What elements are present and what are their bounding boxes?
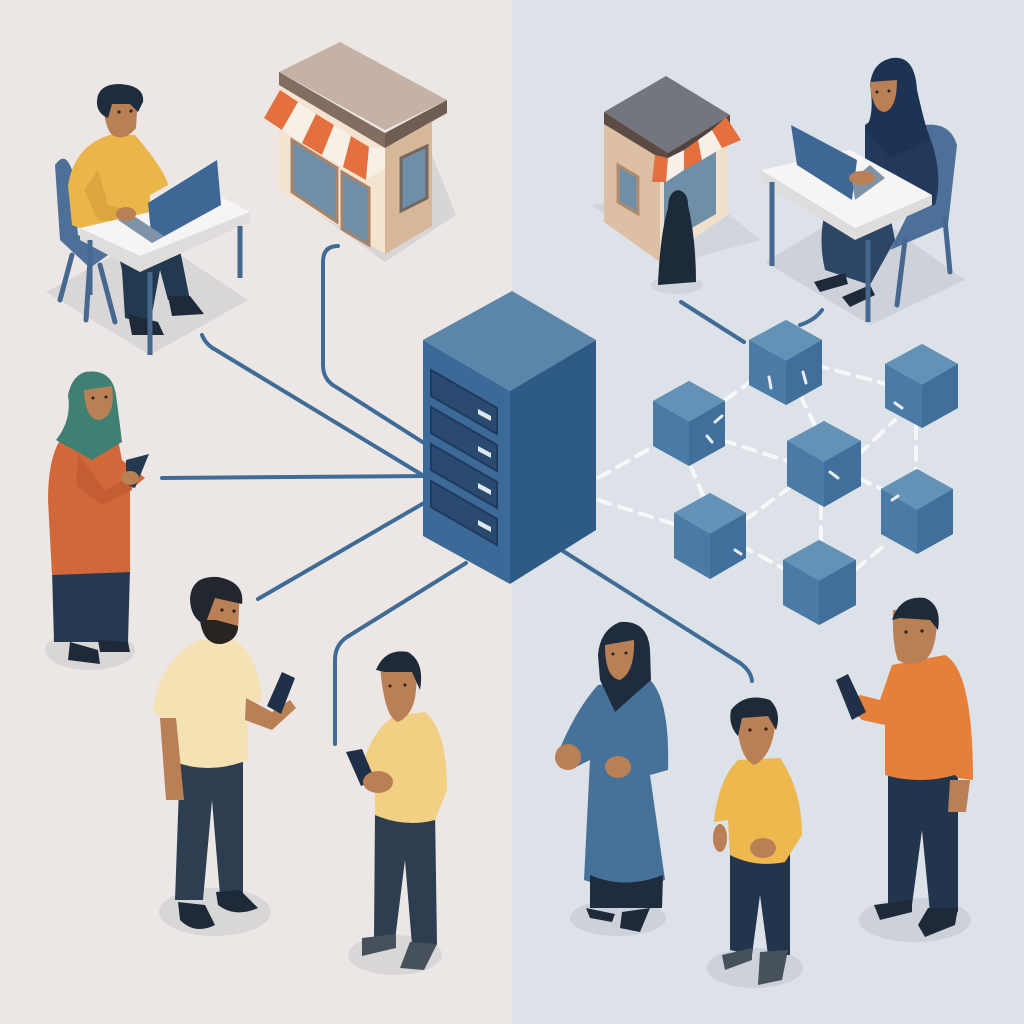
laptop: [791, 125, 857, 200]
server indicator lights: [478, 409, 491, 532]
torso: [68, 135, 168, 240]
server drive bays: [431, 370, 497, 545]
desk: [80, 196, 250, 272]
woman in blue dress, right: [555, 622, 668, 936]
veiled person at shop: [651, 190, 703, 294]
cube node 7: [783, 540, 856, 625]
veiled person at laptop, right: [761, 58, 965, 325]
face details: [904, 629, 924, 634]
striped awning: [264, 90, 385, 180]
person at laptop, left: [46, 84, 250, 355]
face details: [876, 90, 890, 94]
laptop: [148, 160, 221, 243]
arm: [84, 170, 128, 222]
boy with yellow shirt, left: [346, 651, 447, 975]
boy with mustard shirt, right: [707, 698, 803, 988]
cube node 6: [674, 493, 746, 579]
face details: [388, 684, 406, 688]
cube connector ticks: [707, 372, 902, 554]
sleeve: [76, 455, 132, 505]
face details: [220, 608, 236, 613]
face details: [612, 652, 628, 656]
desk: [761, 150, 932, 238]
cube node 2: [885, 344, 958, 428]
hijab: [865, 58, 930, 158]
cube node 5: [881, 469, 953, 554]
connection lines from central server: [162, 246, 822, 744]
clothes: [865, 115, 938, 215]
man in orange sweater with phone: [836, 598, 973, 942]
cube node 1: [749, 320, 822, 405]
face details: [92, 396, 108, 400]
cube node 3: [653, 381, 725, 466]
storefront left: [264, 42, 456, 262]
head: [103, 95, 138, 137]
chair: [890, 125, 957, 250]
storefront right: [592, 76, 760, 294]
striped awning: [652, 117, 741, 182]
legs: [115, 240, 190, 325]
face details: [117, 109, 133, 114]
chair: [60, 255, 115, 322]
woman with green hijab and phone: [45, 371, 149, 670]
blockchain node cubes: [653, 320, 958, 625]
central server tower: [423, 291, 596, 584]
face details: [748, 727, 768, 732]
dashed peer-to-peer links: [598, 365, 916, 572]
cube node 4: [787, 421, 861, 507]
bearded man with phone: [153, 577, 296, 936]
